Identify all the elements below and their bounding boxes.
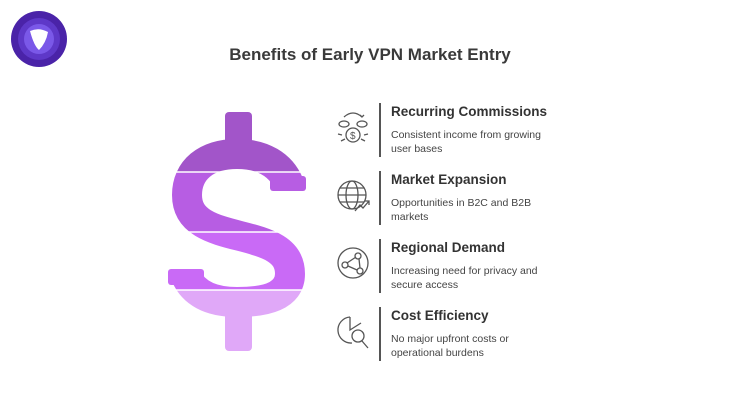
icon: network globe <box>337 247 369 279</box>
item: cost efficiency <box>337 307 509 361</box>
icon: globe growth <box>337 180 370 212</box>
dollar sign graphic <box>168 112 306 351</box>
item: market expansion: Market Expansion <box>391 172 507 187</box>
icon: coins <box>338 112 368 143</box>
item: regional demand <box>337 239 538 293</box>
item: cost efficiency: Cost Efficiency <box>391 308 489 323</box>
item: recurring commissions: Consistent income from growing user bases <box>391 129 541 155</box>
icon: coins: $ <box>350 131 356 142</box>
title: Benefits of Early VPN Market Entry <box>229 45 511 64</box>
item: recurring commissions <box>338 103 547 157</box>
logo <box>11 11 67 67</box>
item: recurring commissions: Recurring Commissions <box>391 104 547 119</box>
icon: pie chart search <box>337 316 368 348</box>
item: cost efficiency: No major upfront costs or operational burdens <box>391 333 509 359</box>
item: market expansion: Opportunities in B2C and B2B markets <box>391 197 531 223</box>
item: regional demand: Increasing need for privacy and secure access <box>391 265 538 291</box>
item: market expansion <box>337 171 531 225</box>
item: regional demand: Regional Demand <box>391 240 505 255</box>
